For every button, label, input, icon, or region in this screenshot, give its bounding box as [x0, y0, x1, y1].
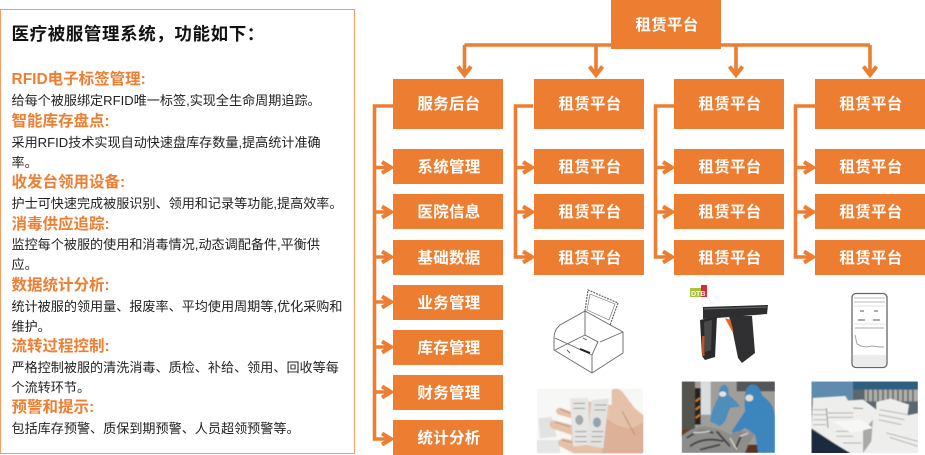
box: column 3 item 1: 租赁平台 [698, 158, 762, 176]
panel: feature list [0, 8, 355, 454]
box: statistical analysis [393, 420, 503, 455]
box: column 4 item 3: 租赁平台 [839, 250, 903, 266]
box: column 2 item 3 [534, 240, 644, 275]
box: statistical analysis: 统计分析 [417, 430, 481, 446]
heading: checkout device: 收发台领用设备: [12, 174, 125, 190]
logo: DTB brand mark: DTB [691, 291, 705, 298]
text: statistics line 2: 维护。 [12, 318, 51, 334]
arrow: column 4 tree [796, 106, 815, 262]
heading: statistics: 数据统计分析: [12, 276, 110, 294]
image: staff in protective suits [682, 381, 775, 453]
box: column 2 item 2 [534, 194, 644, 229]
image: RFID handheld scanner [690, 285, 768, 363]
box: system management [393, 149, 503, 184]
box: system management: 系统管理 [417, 158, 481, 176]
text: alerts: 包括库存预警、质保到期预警、人员超领预警等。 [12, 420, 300, 436]
heading: smart inventory: 智能库存盘点: [12, 112, 110, 130]
box: column 4 item 1: 租赁平台 [839, 158, 903, 176]
box: column 4 item 2 [815, 194, 925, 229]
box: column 3 header [674, 79, 784, 129]
box: column 3 item 2: 租赁平台 [698, 204, 762, 220]
box: column 3 item 1 [674, 149, 784, 184]
box: column 4 header: 租赁平台 [839, 96, 903, 113]
box: root platform: 租赁平台 [635, 16, 699, 34]
heading: alerts: 预警和提示: [12, 398, 94, 416]
box: inventory management: 库存管理 [417, 340, 481, 356]
heading: process control: 流转过程控制: [12, 338, 110, 354]
box: column 2 item 3: 租赁平台 [558, 250, 622, 266]
box: column 3 item 3: 租赁平台 [698, 250, 762, 266]
box: finance management: 财务管理 [417, 384, 481, 402]
box: column 2 item 2: 租赁平台 [558, 204, 622, 220]
box: column 4 item 3 [815, 240, 925, 275]
box: base data: 基础数据 [417, 250, 481, 266]
box: business management [393, 285, 503, 320]
text: process control: 严格控制被服的清洗消毒、质检、补给、领用、回收等每 [12, 360, 339, 374]
box: column 2 header [534, 79, 644, 129]
text: process control line 2: 个流转环节。 [12, 380, 90, 394]
box: column 2 header: 租赁平台 [558, 96, 622, 113]
arrow: column 3 tree [656, 106, 674, 262]
box: column 1 header [393, 79, 503, 129]
box: column 1 header: 服务后台 [417, 96, 481, 113]
box: hospital info [393, 194, 503, 229]
text: RFID tag management: 给每个被服绑定RFID唯一标签,实现全生命周期追踪。 [12, 92, 321, 108]
box: column 3 item 3 [674, 240, 784, 275]
box: column 4 item 1 [815, 149, 925, 184]
box: column 2 item 1: 租赁平台 [558, 158, 622, 176]
text: disinfection tracking line 2: 应。 [12, 256, 38, 272]
box: column 3 header: 租赁平台 [698, 96, 762, 113]
box: finance management [393, 375, 503, 410]
heading: disinfection tracking: 消毒供应追踪: [12, 216, 110, 232]
heading: RFID tag management: RFID电子标签管理: [12, 70, 146, 88]
arrow: root to four columns [458, 45, 876, 75]
text: smart inventory line 2: 率。 [12, 154, 38, 170]
box: column 3 item 2 [674, 194, 784, 229]
box: column 4 item 2: 租赁平台 [839, 204, 903, 220]
image: RFID tags on hand [537, 388, 645, 455]
box: inventory management [393, 330, 503, 365]
box: root platform [611, 0, 721, 49]
box: hospital info: 医院信息 [417, 204, 481, 220]
box: business management: 业务管理 [417, 294, 481, 312]
icon: smartphone app [852, 294, 887, 368]
arrow: column 1 tree [374, 106, 393, 444]
text: statistics: 统计被服的领用量、报废率、平均使用周期等,优化采购和 [12, 298, 342, 314]
heading: panel title: 医疗被服管理系统，功能如下： [12, 24, 265, 44]
text: smart inventory: 采用RFID技术实现自动快速盘库存数量,提高统计准确 [12, 134, 321, 150]
image: stacked linens [811, 381, 920, 455]
box: base data [393, 240, 503, 275]
box: column 2 item 1 [534, 149, 644, 184]
images: device and photo illustrations [536, 285, 918, 454]
text: checkout device: 护士可快速完成被服识别、领用和记录等功能,提高效率。 [12, 196, 342, 210]
arrow: column 2 tree [516, 106, 533, 262]
icon: RFID cabinet line drawing [554, 290, 623, 373]
text: disinfection tracking: 监控每个被服的使用和消毒情况,动态调配备件,平衡供 [12, 236, 320, 252]
box: column 4 header [815, 79, 925, 129]
